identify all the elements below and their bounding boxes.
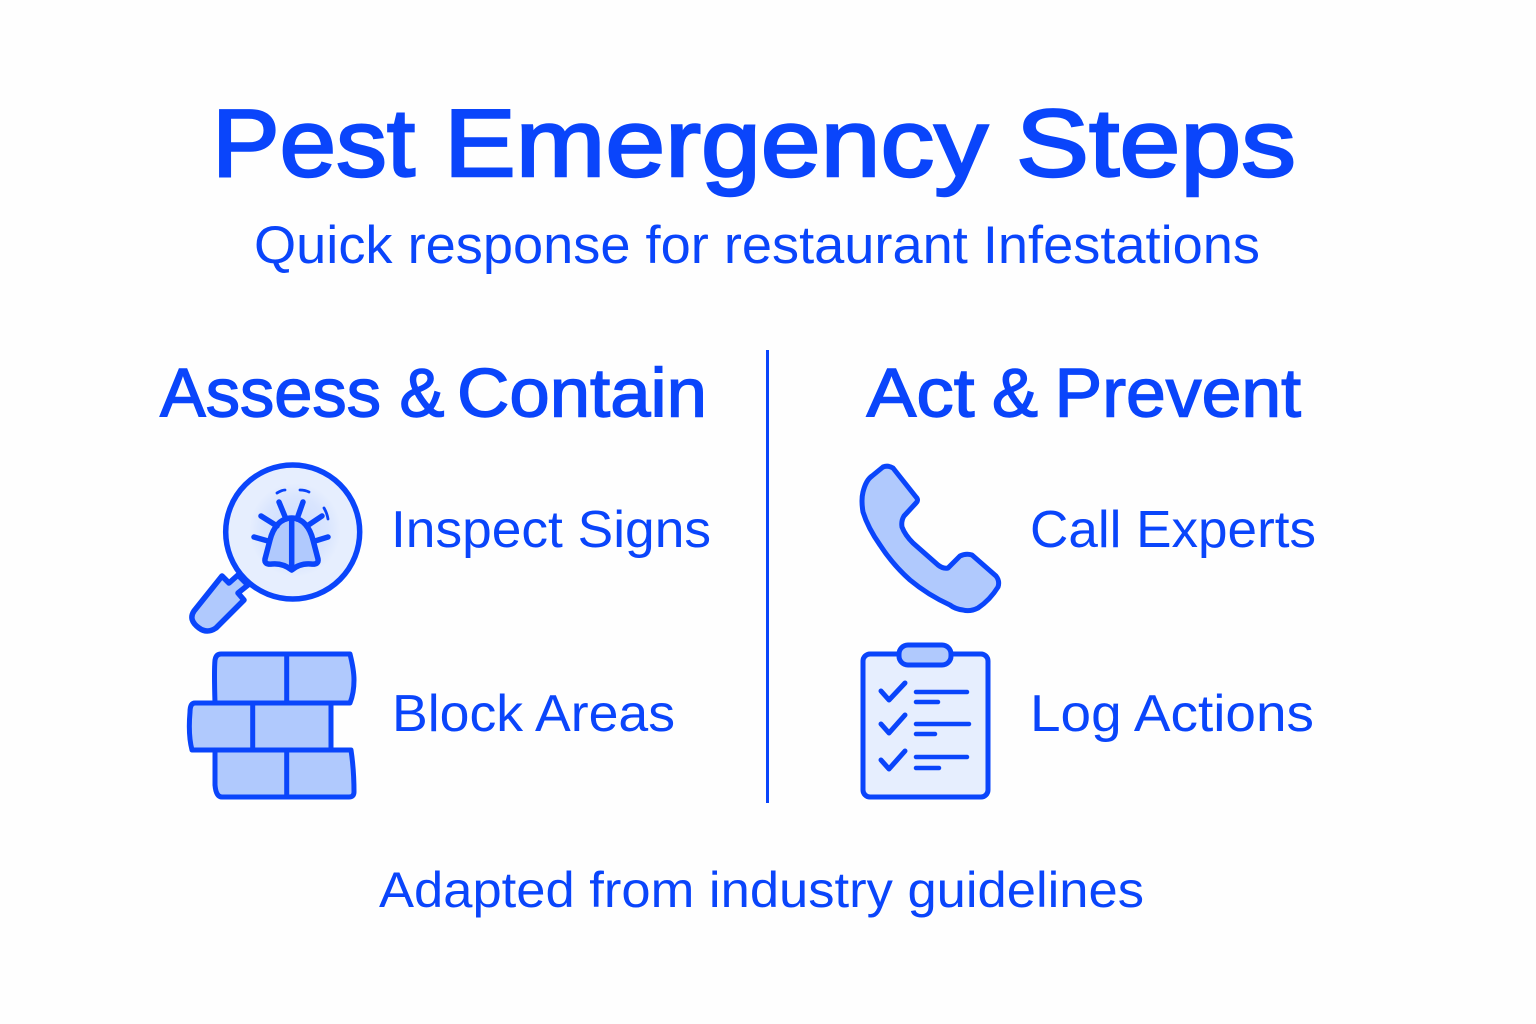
panel: act and prevent <box>862 354 1316 797</box>
heading: assess and contain: Assess <box>160 354 381 432</box>
heading: act and prevent: Prevent <box>1054 354 1301 432</box>
icon: brick wall <box>189 654 354 797</box>
heading: act and prevent: Act <box>866 354 974 432</box>
title: Pest <box>212 90 415 197</box>
title <box>212 90 1296 197</box>
label: inspect signs: Inspect Signs <box>391 501 711 559</box>
heading: act and prevent: & <box>992 354 1038 432</box>
heading: assess and contain: & <box>400 354 444 432</box>
heading: act and prevent <box>866 354 1301 432</box>
subtitle: Quick response for restaurant Infestations <box>254 216 1260 275</box>
label: call experts: Call Experts <box>1030 501 1316 559</box>
heading: assess and contain: Contain <box>457 354 707 432</box>
label: block areas: Block Areas <box>392 685 675 743</box>
label: log actions: Log Actions <box>1030 685 1314 743</box>
footer note: Adapted from industry guidelines <box>379 862 1144 918</box>
icon: phone <box>862 466 999 611</box>
icon: clipboard checklist <box>863 645 988 797</box>
divider <box>766 350 769 803</box>
title: Emergency <box>444 90 988 197</box>
panel: assess and contain <box>160 354 711 797</box>
heading: assess and contain <box>160 354 707 432</box>
title: Steps <box>1016 90 1296 197</box>
icon: magnifier with bug <box>192 465 360 631</box>
